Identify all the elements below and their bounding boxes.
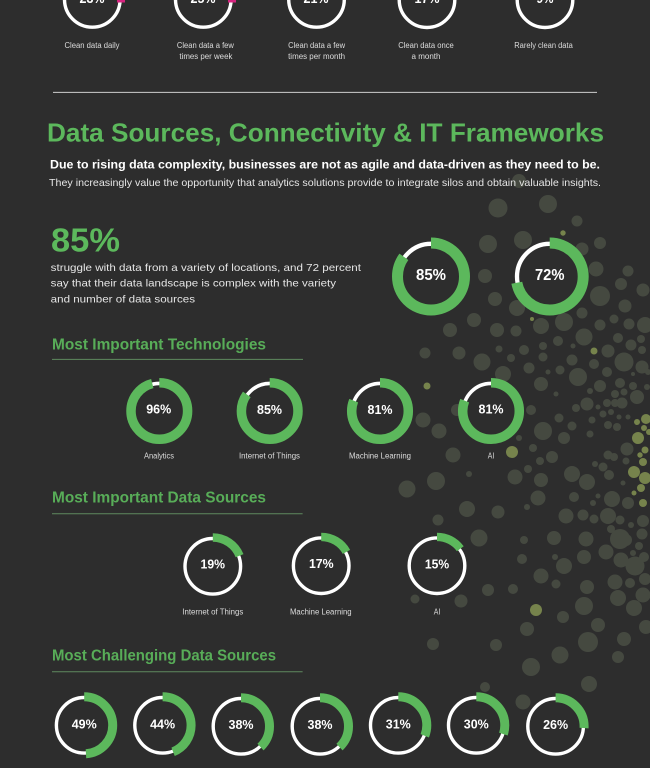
statistic description [51,262,361,306]
big statistic: 85% [51,222,120,259]
ring: few times per month: Clean data a few [288,41,345,50]
donut: internet of things 85%: Internet of Things [239,452,300,461]
ring: few times per month [288,0,345,61]
ring: few times per week: times per week [179,52,233,61]
donut: AI 81%: 81% [478,402,504,416]
donut: internet of things 19% [182,538,243,616]
statistic description: say that their data landscape is complex with the variety [51,278,337,290]
donut: challenging 38% (second): 38% [308,717,333,732]
donut: 85%: 85% [416,267,446,284]
donut: challenging 44%: 44% [150,716,176,731]
intro sentence: They increasingly value the opportunity that analytics solutions provide to integrate silos and obtain valuable insights. [49,177,601,189]
donut: 72% [516,243,583,310]
donut: challenging 26% [527,698,584,755]
background dot cluster [398,174,650,710]
donut: internet of things 85%: 85% [257,402,282,417]
donut: challenging 31% [370,697,427,754]
donut: challenging 38% (first): 38% [228,717,254,732]
donut: challenging 49%: 49% [72,716,97,731]
ring: once a month: a month [412,52,440,61]
donut: machine learning 81%: 81% [368,402,393,417]
donut: internet of things 85% [239,383,300,461]
ring: rarely clean data [514,0,573,50]
donut: machine learning 17%: Machine Learning [290,607,352,616]
statistic description: and number of data sources [51,294,195,306]
heading: most important technologies: Most Important Technologies [52,337,266,354]
partial rings row: cleaning frequency [64,0,573,61]
donut: analytics 96%: Analytics [144,452,174,461]
ring: once a month [398,0,455,61]
bold subtitle: Due to rising data complexity, businesses are not as agile and data-driven as they need to be. [50,158,600,172]
ring: once a month: Clean data once [398,41,454,50]
donut: internet of things 19%: Internet of Things [182,607,243,616]
donut: machine learning 81% [349,383,411,461]
ring: clean data daily: Clean data daily [64,41,120,50]
donut: challenging 49% [56,697,113,754]
donut: analytics 96%: 96% [146,401,172,416]
donut: AI 81%: AI [488,452,494,461]
heading: most important data sources: Most Important Data Sources [52,490,266,507]
title: Data Sources, Connectivity & IT Frameworks [47,118,604,148]
donut: machine learning 81%: Machine Learning [349,452,411,461]
donut: challenging 30% [448,697,505,754]
donut: challenging 31%: 31% [386,716,411,731]
donut: challenging 38% (second) [292,698,348,755]
ring: few times per week [176,0,236,61]
donut: challenging 30%: 30% [464,716,489,731]
donut: analytics 96% [131,383,188,461]
olive accent dots [424,230,650,616]
statistic description: struggle with data from a variety of locations, and 72 percent [51,262,361,274]
ring: few times per week: Clean data a few [177,41,234,50]
donut: AI 15% [408,537,466,616]
donut: AI 81% [463,383,519,461]
ring: few times per month: times per month [288,52,345,61]
ring: rarely clean data: Rarely clean data [514,41,573,50]
donut: 85% [398,243,464,310]
donut: challenging 44% [134,697,191,754]
donut: challenging 26%: 26% [543,717,569,732]
ring: clean data daily [64,0,125,50]
donut: machine learning 17%: 17% [309,556,334,571]
donut: internet of things 19%: 19% [201,557,225,572]
heading: most challenging data sources: Most Challenging Data Sources [52,648,276,665]
donut: AI 15%: AI [434,607,440,616]
donut: machine learning 17% [290,537,352,616]
donut: 72%: 72% [535,267,565,284]
donut: challenging 38% (first) [212,698,270,755]
donut: AI 15%: 15% [425,556,450,571]
